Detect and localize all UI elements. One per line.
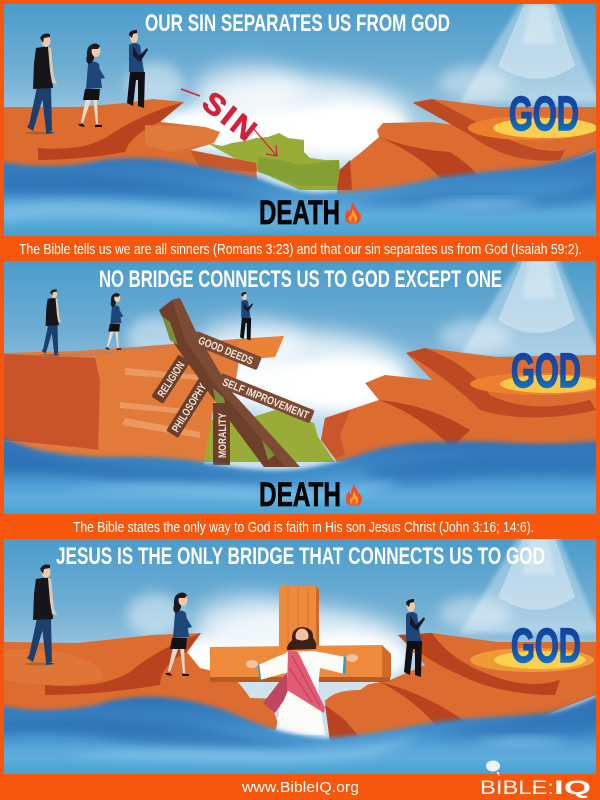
panel 1: sin separates xyxy=(0,4,600,245)
wooden cross xyxy=(210,586,391,682)
icon: brain above logo xyxy=(486,760,500,776)
sign: good deeds: GOOD DEEDS xyxy=(196,335,255,368)
sign: self improvement xyxy=(217,373,315,423)
glow under GOD 2 xyxy=(470,373,600,395)
people 1 xyxy=(25,30,148,134)
sign: religion: RELIGION xyxy=(156,360,188,400)
water 1 xyxy=(4,146,596,236)
sky 1 xyxy=(4,4,596,196)
people 2 xyxy=(40,289,253,356)
people 3 xyxy=(25,564,425,677)
sign: religion xyxy=(151,354,190,404)
sign: philosophy: PHILOSOPHY xyxy=(170,381,210,435)
left cliff 3 xyxy=(4,633,280,730)
sign: morality xyxy=(213,403,230,465)
glow under GOD 3 xyxy=(470,648,594,672)
DEATH label 2: DEATH xyxy=(259,476,341,514)
clouds and light beam 3 xyxy=(127,535,600,692)
water 3 xyxy=(0,690,600,785)
broken wooden beam xyxy=(159,298,300,467)
sky 2 xyxy=(4,261,596,474)
SIN label with arrow: SIN xyxy=(196,86,265,150)
logo: Bible IQ xyxy=(480,778,591,799)
sky 3 xyxy=(4,539,596,742)
website url: www.BibleIQ.org xyxy=(241,779,359,796)
glow under GOD 1 xyxy=(468,116,597,140)
left cliff 2 xyxy=(4,336,284,465)
left cliff 1 xyxy=(4,99,257,180)
green valley 2 xyxy=(195,410,335,462)
panel 2: no bridge xyxy=(0,258,600,525)
right cliff 1 xyxy=(337,99,596,195)
flame icon 2 xyxy=(346,484,362,506)
logo: Bible IQ: IQ xyxy=(554,778,591,799)
logo: Bible IQ: BIBLE: xyxy=(480,778,554,799)
right cliff 2 xyxy=(321,348,596,462)
Jesus figure xyxy=(246,627,358,735)
sign: morality: MORALITY xyxy=(217,412,229,458)
gap below cross xyxy=(237,681,373,700)
right cliff 3 xyxy=(325,633,596,745)
SIN label with arrow xyxy=(181,86,277,156)
sign: philosophy xyxy=(166,378,211,438)
sign: self improvement: SELF IMPROVEMENT xyxy=(220,376,310,422)
water 2 xyxy=(4,434,596,514)
clouds and light beam 2 xyxy=(127,258,600,415)
title 1: OUR SIN SEPARATES US FROM GOD xyxy=(145,10,450,37)
clouds and light beam 1 xyxy=(127,4,600,161)
green valley 1 xyxy=(207,133,342,190)
flame icon 1 xyxy=(345,202,361,224)
green valley shade 1 xyxy=(258,157,339,186)
panel 3: Jesus is the bridge xyxy=(0,535,600,785)
DEATH label 1: DEATH xyxy=(259,194,340,232)
